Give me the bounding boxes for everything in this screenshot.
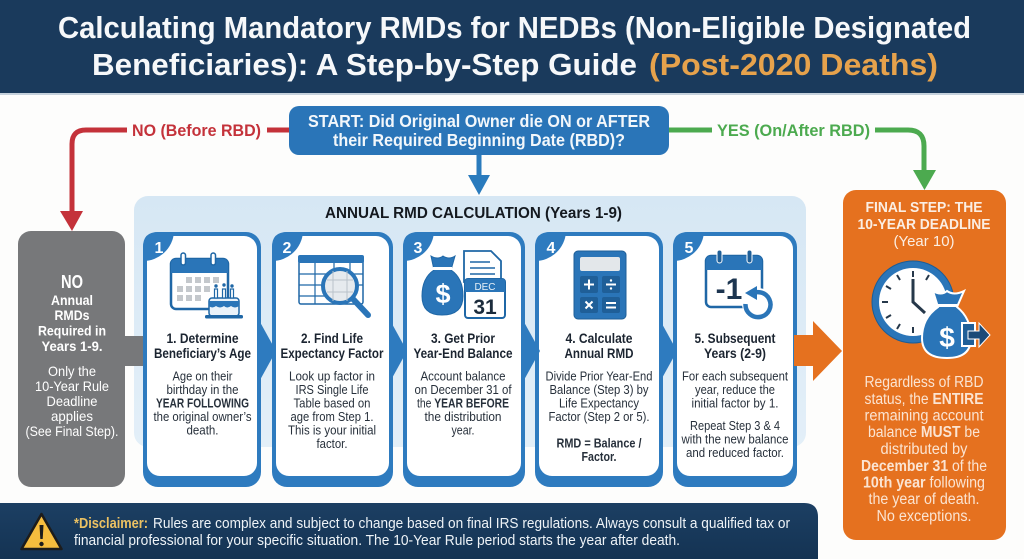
step 4 text: Divide Prior Year-End: [546, 368, 652, 384]
panel: step 4: [535, 232, 663, 487]
final step text: balance MUST be: [868, 424, 980, 441]
panel: step 1: [143, 232, 261, 487]
final step text: distributed by: [880, 441, 968, 458]
final step text: the year of death.: [868, 491, 980, 508]
step 5 text: and reduced factor.: [686, 445, 784, 460]
disclaimer text: Rules are complex and subject to change based on final IRS regulations. Always consult a qualified tax or: [153, 516, 790, 532]
label: YES on or after RBD: YES (On/After RBD): [717, 121, 870, 140]
panel: no RMDs required: [18, 231, 125, 487]
panel: no RMDs required: NO: [61, 272, 83, 292]
step 3 heading: 3. Get Prior: [431, 330, 495, 346]
panel: step 2: [272, 232, 393, 487]
final step heading: (Year 10): [894, 233, 954, 250]
final step heading: [858, 199, 990, 250]
arrow: step 3 to step 4: [524, 322, 540, 380]
step 4 text: Factor.: [582, 449, 616, 464]
step 2 text: age from Step 1.: [290, 409, 374, 424]
step 4 text: RMD = Balance /: [556, 436, 642, 450]
step 3 text: year.: [452, 422, 474, 438]
icon: money bag, document and December 31 calendar: DEC: [474, 282, 496, 293]
step 1 text: YEAR FOLLOWING: [156, 396, 249, 410]
step 2 text: Table based on: [294, 396, 370, 410]
panel: no RMDs required: RMDs: [54, 307, 90, 323]
disclaimer text: financial professional for your specific situation. The 10-Year Rule period starts the year after death.: [74, 533, 680, 549]
step 5 badge: 5: [685, 240, 694, 257]
step 2 text: IRS Single Life: [296, 382, 368, 397]
panel: annual RMD calculation background: [134, 196, 806, 447]
step 3 badge: 3: [414, 240, 423, 257]
step 3 text: [414, 368, 512, 438]
panel: no RMDs required: Only the: [48, 363, 96, 379]
step 3 text: the distribution: [424, 409, 502, 424]
disclaimer text: [74, 516, 790, 549]
final step text: remaining account: [864, 408, 984, 424]
arrow: YES branch: [669, 130, 936, 190]
start decision box: [289, 106, 669, 155]
final step text: [861, 374, 987, 525]
step 1 text: death.: [186, 422, 218, 438]
step 5 heading: Years (2-9): [704, 345, 766, 361]
step 1 badge: [143, 232, 174, 261]
panel: no RMDs required: 10-Year Rule: [35, 378, 109, 394]
step 1 text: the original owner’s: [154, 409, 252, 424]
step 4 badge: [535, 232, 566, 261]
step 5 text: For each subsequent: [682, 368, 788, 384]
step 2 text: This is your initial: [288, 422, 376, 438]
step 4 badge: 4: [547, 240, 556, 257]
icon: warning triangle: [22, 514, 62, 549]
icon: clock and money bag with exit arrow: [872, 261, 990, 358]
arrow: step 2 to step 3: [391, 322, 407, 380]
step 1 badge: 1: [155, 240, 164, 257]
step 4 text: Factor (Step 2 or 5).: [548, 409, 650, 424]
step 2 heading: Expectancy Factor: [280, 345, 384, 361]
step 2 badge: [272, 232, 303, 261]
step 2 text: [288, 368, 376, 451]
final step heading: FINAL STEP: THE: [866, 199, 982, 216]
panel: no RMDs required: applies: [51, 408, 93, 424]
step 3 heading: [414, 330, 513, 361]
start decision box: their Required Beginning Date (RBD)?: [333, 130, 625, 150]
title: (Post-2020 Deaths): [649, 47, 938, 82]
step 5 text: Repeat Step 3 & 4: [690, 418, 780, 433]
icon: money bag, document and December 31 calendar: [422, 251, 505, 319]
title: Beneficiaries): A Step-by-Step Guide: [92, 47, 637, 82]
final step text: December 31 of the: [861, 458, 987, 475]
step 4 text: Balance (Step 3) by: [550, 382, 649, 397]
heading: annual RMD calculation: ANNUAL RMD CALCULATION (Years 1-9): [325, 205, 622, 222]
panel: no RMDs required: Required in: [38, 322, 106, 338]
step 4 heading: 4. Calculate: [566, 330, 633, 346]
icon: money bag, document and December 31 calendar: 31: [473, 296, 497, 319]
panel: no RMDs required: Years 1-9.: [42, 338, 102, 354]
step 1 heading: [154, 330, 251, 361]
step 1 heading: 1. Determine: [166, 330, 239, 346]
step 5 text: year, reduce the: [695, 382, 775, 397]
arrow: NO branch: [60, 130, 290, 231]
final step text: 10th year following: [863, 474, 985, 492]
step 3 heading: Year-End Balance: [414, 345, 513, 361]
panel: no RMDs required: Deadline: [46, 393, 98, 409]
step 4 heading: [564, 330, 634, 361]
title: [58, 10, 971, 82]
step 3 text: the YEAR BEFORE: [417, 396, 509, 410]
step 3 text: Account balance: [420, 368, 506, 384]
step 2 text: Look up factor in: [289, 368, 375, 384]
step 4 text: [546, 368, 652, 464]
panel: no RMDs required: Annual: [51, 292, 93, 308]
final step text: Regardless of RBD: [864, 374, 984, 391]
start decision box: START: Did Original Owner die ON or AFTER: [308, 111, 650, 131]
step 5 text: initial factor by 1.: [692, 396, 778, 410]
arrow: step 1 to step 2: [260, 322, 276, 380]
label: NO before RBD: NO (Before RBD): [132, 121, 261, 140]
step 3 text: on December 31 of: [414, 382, 512, 397]
step 4 text: Life Expectancy: [559, 396, 639, 410]
step 5 badge: [673, 232, 704, 261]
panel: no RMDs required: (See Final Step).: [26, 423, 118, 439]
arrow: start to calculation: [468, 155, 490, 195]
icon: calendar minus one with reset arrow: -1: [716, 273, 742, 306]
arrow: step 5 to final step: [794, 321, 842, 381]
disclaimer bar: [0, 503, 818, 559]
step 5 text: with the new balance: [681, 432, 788, 446]
icon: clock and money bag with exit arrow: $: [939, 322, 955, 353]
step 2 badge: 2: [283, 240, 292, 257]
panel: step 3: [403, 232, 525, 487]
step 2 heading: 2. Find Life: [301, 330, 363, 346]
step 2 text: factor.: [316, 436, 348, 451]
final step heading: 10-YEAR DEADLINE: [858, 216, 990, 233]
icon: calculator: [574, 251, 626, 319]
icon: calendar minus one with reset arrow: [706, 250, 774, 320]
disclaimer text: *Disclaimer:: [74, 516, 148, 532]
final step text: No exceptions.: [876, 508, 972, 525]
step 2 heading: [280, 330, 384, 361]
icon: money bag, document and December 31 calendar: $: [435, 279, 451, 309]
step 4 heading: Annual RMD: [564, 345, 634, 361]
step 1 text: [154, 368, 252, 438]
title: Calculating Mandatory RMDs for NEDBs (Non-Eligible Designated: [58, 10, 971, 45]
step 1 text: birthday in the: [166, 382, 238, 397]
step 1 text: Age on their: [172, 368, 233, 384]
connector: no box to step 1: [120, 336, 146, 366]
step 5 heading: [694, 330, 776, 361]
icon: calendar with birthday cake: [171, 253, 243, 318]
final step text: status, the ENTIRE: [864, 391, 984, 408]
icon: table with magnifier: [298, 255, 368, 315]
header banner: [0, 0, 1024, 95]
step 5 text: [681, 368, 788, 460]
step 1 heading: Beneficiary’s Age: [154, 345, 251, 361]
step 3 badge: [403, 232, 434, 261]
panel: step 5: [673, 232, 797, 487]
arrow: step 4 to step 5: [661, 322, 677, 380]
step 5 heading: 5. Subsequent: [694, 330, 776, 346]
panel: final step: [843, 190, 1006, 540]
